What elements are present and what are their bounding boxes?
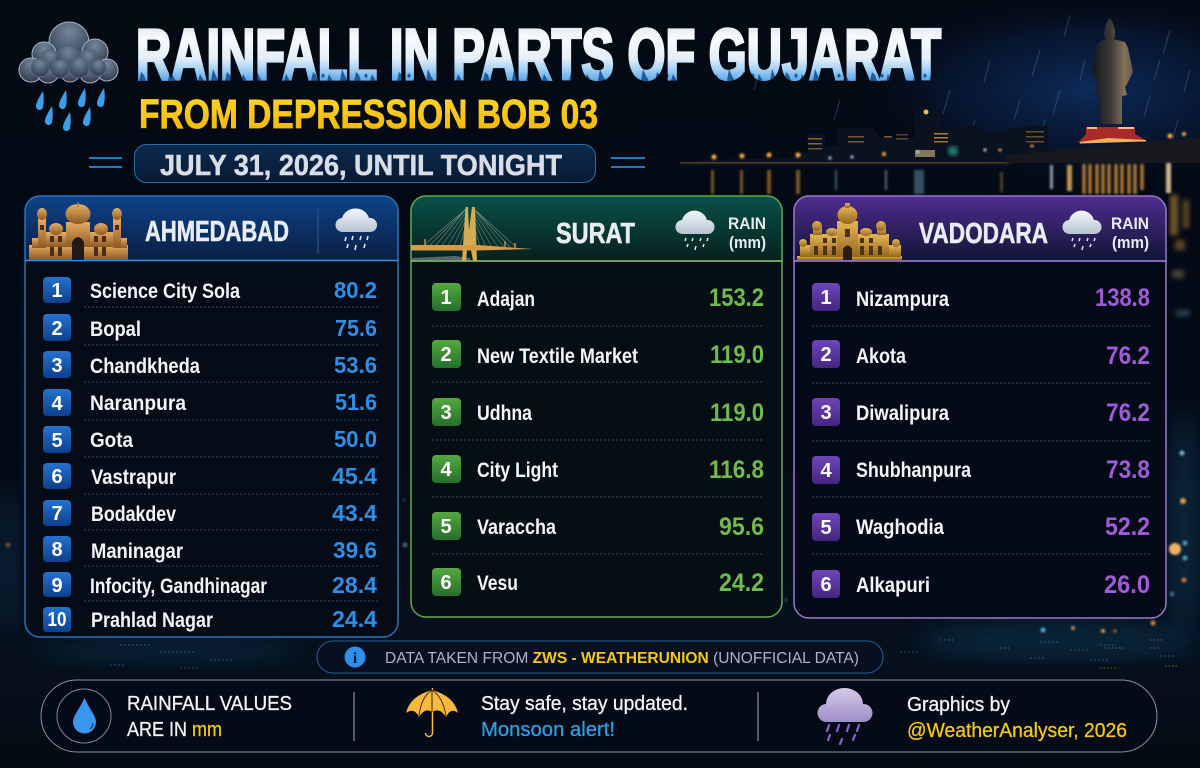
Surat rain unit label: RAIN <box>728 214 766 233</box>
row 2 <box>812 340 1150 370</box>
background: rain streaks <box>754 15 1190 140</box>
date banner: JULY 31, 2026, UNTIL TONIGHT <box>160 150 562 182</box>
row 5 <box>432 512 764 541</box>
row 10: 10 <box>48 609 66 631</box>
row 8 <box>43 536 377 563</box>
footer bar <box>41 680 1157 752</box>
row 2: 76.2 <box>1106 342 1150 370</box>
background: lower glowing city lights <box>0 195 1200 668</box>
row 1: 80.2 <box>334 277 377 303</box>
row 5: Varaccha <box>477 516 556 539</box>
row 7 <box>43 500 377 526</box>
Vadodara city name: VADODARA <box>919 218 1048 250</box>
row 1 <box>812 283 1150 312</box>
row 4: 51.6 <box>335 389 377 415</box>
row 7: 43.4 <box>332 500 377 526</box>
row 9: 28.4 <box>332 572 377 598</box>
rows <box>812 283 1150 599</box>
row 6 <box>432 568 764 597</box>
rainfall units note <box>127 693 292 741</box>
row 3: 119.0 <box>710 399 764 427</box>
row 5: 52.2 <box>1105 513 1150 541</box>
row 1: 1 <box>820 287 832 309</box>
row 1: Nizampura <box>856 288 949 311</box>
credit <box>907 694 1127 742</box>
row 4 <box>812 456 1150 484</box>
icon: umbrella <box>406 688 458 736</box>
row 6: 6 <box>820 574 832 596</box>
row 2: 75.6 <box>335 315 377 341</box>
row 5 <box>812 513 1150 541</box>
row 4: Shubhanpura <box>856 459 971 482</box>
row 4: 4 <box>440 459 452 481</box>
row 4: 73.8 <box>1106 456 1150 484</box>
icon: Vadodara palace <box>797 203 902 260</box>
icon: Surat rain cloud <box>675 211 715 250</box>
data source note: DATA TAKEN FROM ZWS - WEATHERUNION (UNOFFICIAL DATA) <box>385 650 859 667</box>
row 10: Prahlad Nagar <box>91 609 213 632</box>
row 4: City Light <box>477 459 558 482</box>
row 1: Adajan <box>477 288 535 311</box>
row 3: Diwalipura <box>856 402 949 425</box>
row 9: Infocity, Gandhinagar <box>90 575 267 598</box>
background: water reflections <box>711 163 1171 194</box>
Vadodara rain unit label <box>1111 214 1149 252</box>
icon: Ahmedabad rain cloud <box>335 208 377 250</box>
row 10: 24.4 <box>332 606 377 632</box>
icon: water drop <box>57 689 111 743</box>
rainfall units note: ARE IN mm <box>127 719 222 741</box>
row 6: Alkapuri <box>856 574 930 597</box>
row 5: 50.0 <box>334 426 377 452</box>
row 1 <box>43 277 377 303</box>
row 5: 5 <box>51 430 63 452</box>
icon: info: i <box>353 650 358 667</box>
row 1: Science City Sola <box>90 280 240 303</box>
data source note <box>317 641 883 673</box>
row 8: 39.6 <box>333 537 377 563</box>
row 7: Bodakdev <box>91 503 176 526</box>
icon: Surat cable-stayed bridge <box>411 207 533 261</box>
icon: Statue of Unity with red base <box>1078 18 1147 144</box>
row 5: 5 <box>820 517 832 539</box>
safety message: Monsoon alert! <box>481 719 615 741</box>
row 3: Chandkheda <box>90 355 200 378</box>
safety message: Stay safe, stay updated. <box>481 693 688 715</box>
row 3: 3 <box>51 355 63 377</box>
row 8: 8 <box>51 539 63 561</box>
row 5: Gota <box>90 429 133 452</box>
row 4: 4 <box>820 460 832 482</box>
row 3 <box>432 398 764 427</box>
row 4 <box>432 455 764 484</box>
row 4 <box>43 389 377 416</box>
Vadodara panel header <box>794 196 1166 261</box>
panel: Ahmedabad <box>25 196 398 637</box>
Surat city name: SURAT <box>556 218 635 250</box>
row 10 <box>43 606 377 632</box>
row 2: Bopal <box>90 318 141 341</box>
row 6: 24.2 <box>719 569 764 597</box>
row 2: 2 <box>820 344 832 366</box>
icon: info <box>344 646 366 668</box>
row 4: 4 <box>51 393 63 415</box>
Vadodara rain unit label: RAIN <box>1111 214 1149 233</box>
row 9 <box>43 572 377 598</box>
row 6 <box>43 463 377 489</box>
credit: @WeatherAnalyser, 2026 <box>907 720 1127 742</box>
row 5: Waghodia <box>856 516 944 539</box>
row 9: 9 <box>51 575 63 597</box>
Ahmedabad city name: AHMEDABAD <box>145 216 289 248</box>
row 2 <box>432 340 764 369</box>
row 7: 7 <box>51 503 63 525</box>
row 3: 53.6 <box>334 352 377 378</box>
Surat panel header <box>411 196 782 261</box>
date banner <box>89 144 645 182</box>
row 2: New Textile Market <box>477 345 638 368</box>
row 3: 76.2 <box>1106 399 1150 427</box>
row 1: 138.8 <box>1095 284 1150 312</box>
row 5: 95.6 <box>719 513 764 541</box>
row 4: Naranpura <box>90 392 186 415</box>
background: bridge deck <box>1007 137 1200 163</box>
row 2: 119.0 <box>710 341 764 369</box>
background: sky glow behind statue <box>850 0 1200 190</box>
rows <box>432 283 764 597</box>
row 2: Akota <box>856 345 906 368</box>
rain drops <box>36 88 105 131</box>
row 6: 6 <box>440 572 452 594</box>
row 3: 3 <box>440 402 452 424</box>
rainfall units note: RAINFALL VALUES <box>127 693 292 715</box>
Surat rain unit label <box>728 214 766 252</box>
Surat rain unit label: (mm) <box>729 233 766 252</box>
row 5: 5 <box>440 516 452 538</box>
row 2: 2 <box>51 318 63 340</box>
row 1: 1 <box>440 287 452 309</box>
row 6: Vesu <box>477 572 518 595</box>
Ahmedabad panel header <box>25 196 398 260</box>
rows <box>43 277 379 632</box>
panel: Vadodara <box>794 196 1166 618</box>
row 3 <box>812 398 1150 427</box>
row 1: 153.2 <box>709 284 764 312</box>
row 6: 26.0 <box>1104 571 1150 599</box>
row 2 <box>43 314 377 341</box>
safety message <box>481 693 688 741</box>
row 4: 116.8 <box>709 456 764 484</box>
Vadodara rain unit label: (mm) <box>1112 233 1149 252</box>
subtitle: FROM DEPRESSION BOB 03 <box>139 91 598 137</box>
row 6: 6 <box>51 466 63 488</box>
row 6: Vastrapur <box>91 466 176 489</box>
row 6: 45.4 <box>332 463 377 489</box>
row 3: Udhna <box>477 402 532 425</box>
panel: Surat <box>411 196 782 617</box>
icon: Ahmedabad domed monument <box>29 202 128 260</box>
row 8: Maninagar <box>91 540 183 563</box>
icon: purple rain cloud <box>818 688 872 744</box>
row 5 <box>43 426 377 453</box>
row 2: 2 <box>440 344 452 366</box>
background: city skyline <box>680 110 1186 166</box>
row 3: 3 <box>820 402 832 424</box>
row 1 <box>432 283 764 312</box>
row 6 <box>812 570 1150 599</box>
row 1: 1 <box>51 280 63 302</box>
row 3 <box>43 351 377 378</box>
icon: storm cloud with rain drops <box>19 22 118 131</box>
icon: Vadodara rain cloud <box>1062 211 1102 250</box>
credit: Graphics by <box>907 694 1010 716</box>
